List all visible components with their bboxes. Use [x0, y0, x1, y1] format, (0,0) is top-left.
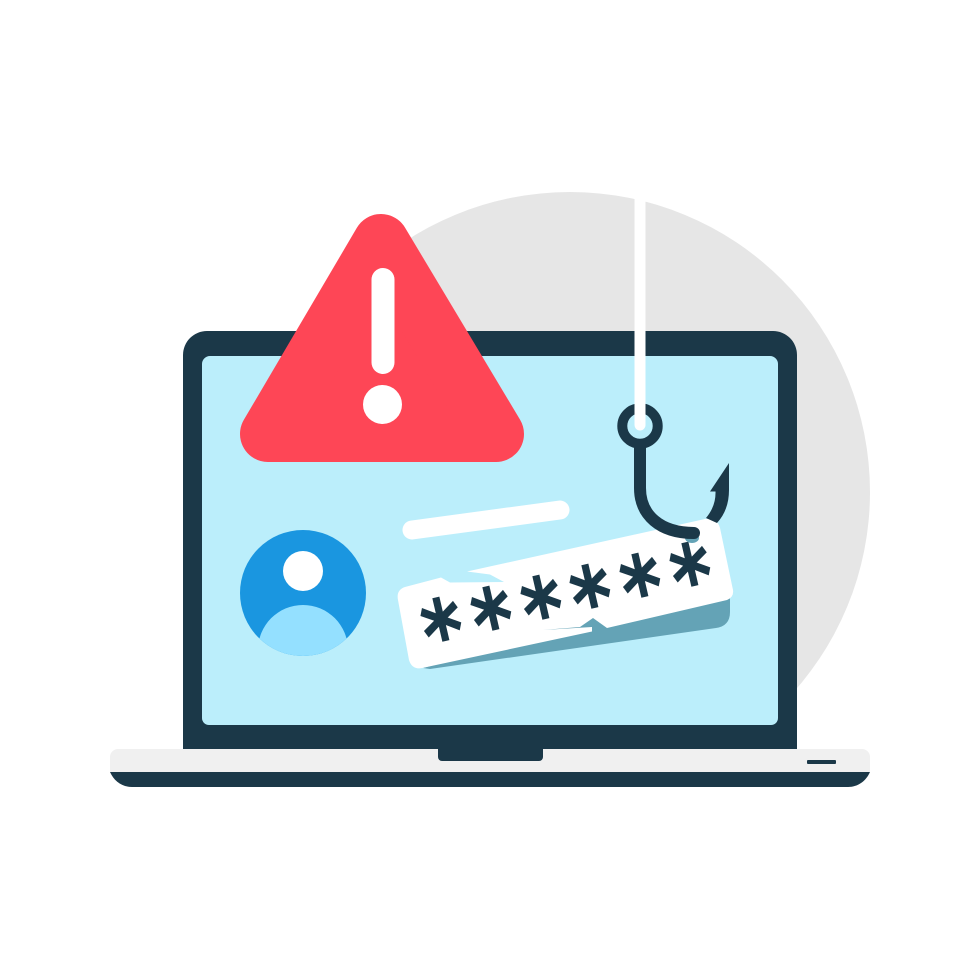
exclamation bar	[372, 268, 394, 374]
laptop lid	[183, 331, 797, 749]
hook barb	[706, 463, 729, 523]
password card	[398, 519, 733, 693]
hinge notch	[438, 749, 543, 761]
password asterisks: *	[513, 555, 576, 671]
user avatar	[240, 530, 366, 656]
illustration: phishing alert on laptop	[110, 192, 870, 787]
fishing hook	[622, 198, 729, 543]
avatar disc	[240, 530, 366, 656]
laptop	[110, 331, 870, 787]
grey background circle	[411, 192, 870, 688]
avatar head	[283, 551, 323, 591]
password asterisks: *	[463, 566, 526, 682]
card shadow	[423, 598, 730, 669]
password asterisks: *	[612, 533, 675, 649]
avatar body	[260, 605, 346, 656]
password asterisks: *	[662, 522, 725, 638]
indicator slot	[807, 760, 836, 764]
hook eye ring	[622, 408, 658, 444]
username bar	[412, 510, 560, 530]
warning triangle	[268, 242, 496, 434]
triangle body	[268, 242, 496, 434]
hook shank	[640, 445, 694, 533]
password asterisks	[413, 522, 725, 693]
exclamation dot	[363, 385, 402, 424]
fishing line	[634, 198, 646, 430]
laptop base	[110, 749, 870, 772]
laptop base front edge	[110, 772, 870, 787]
password asterisks: *	[413, 577, 476, 693]
laptop screen	[202, 356, 778, 725]
torn white card	[398, 519, 733, 668]
password asterisks: *	[562, 544, 625, 660]
hook hole shadow	[685, 533, 699, 543]
